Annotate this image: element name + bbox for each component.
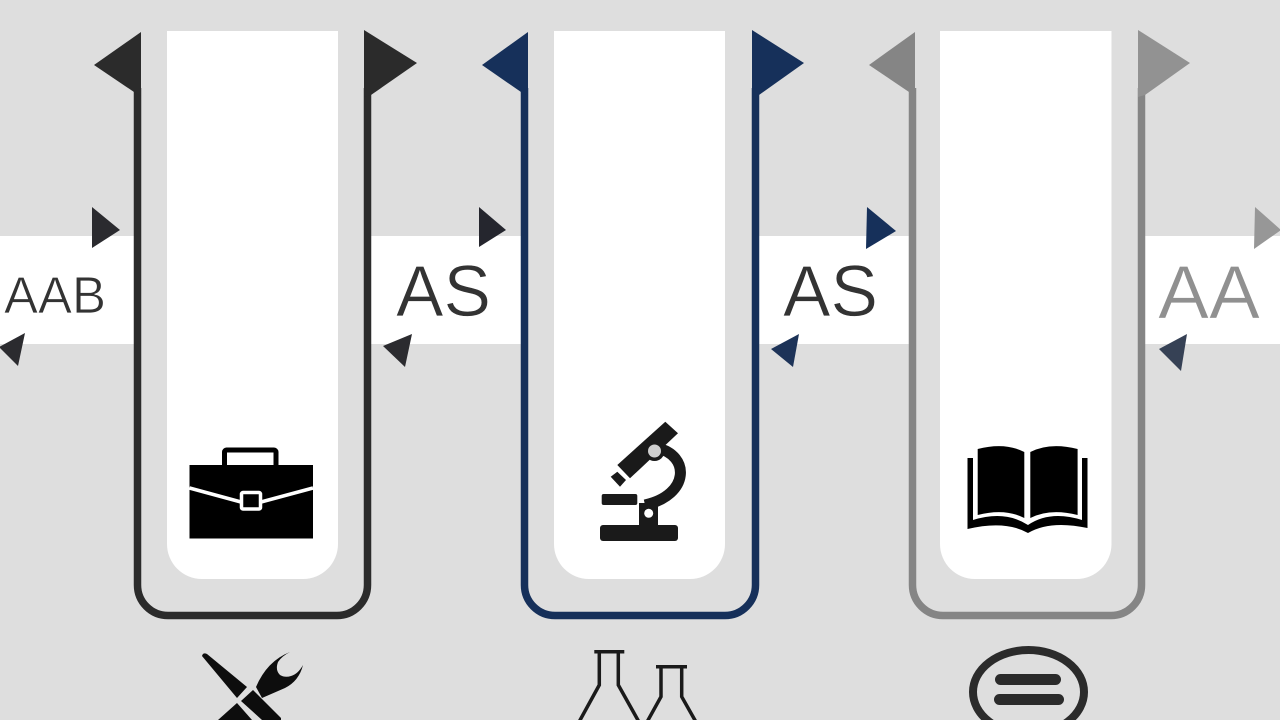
arrow: upper right — [866, 207, 896, 249]
flag arrow: left — [94, 32, 141, 96]
flag arrow: left — [869, 32, 915, 96]
panel outline — [912, 88, 1142, 616]
white card — [940, 31, 1112, 579]
icon: flasks — [579, 652, 696, 720]
icon: briefcase — [190, 450, 313, 538]
label: first AS: AS — [396, 252, 491, 332]
panel outline — [138, 88, 368, 616]
panel: grey column — [869, 30, 1190, 720]
arrow: lower left — [771, 334, 799, 367]
connector band: first AS — [371, 207, 521, 367]
arrow: upper right — [1254, 207, 1280, 249]
icon: crossed tools — [202, 652, 303, 720]
icon: oval with two bars — [973, 650, 1084, 720]
panel outline — [524, 88, 756, 616]
flag arrow: right — [1138, 30, 1190, 97]
icon: open book — [968, 446, 1088, 533]
connector band: AA — [1145, 207, 1280, 371]
label: AAB: AAB — [4, 267, 106, 325]
connector band: second AS — [758, 207, 909, 367]
arrow: lower left — [1159, 334, 1187, 371]
panel: navy column — [482, 30, 804, 720]
icon: microscope — [600, 422, 680, 541]
white card — [167, 31, 338, 579]
arrow: lower left — [0, 333, 25, 366]
connector band: AAB — [0, 207, 134, 366]
label: second AS: AS — [783, 252, 878, 332]
arrow: upper right — [92, 207, 120, 248]
flag arrow: left — [482, 32, 528, 96]
white card — [554, 31, 725, 579]
arrow: upper right — [479, 207, 506, 247]
label: AA: AA — [1158, 250, 1260, 334]
arrow: lower left — [383, 334, 412, 367]
panel: dark column — [94, 30, 417, 720]
flag arrow: right — [752, 30, 804, 97]
flag arrow: right — [364, 30, 417, 97]
